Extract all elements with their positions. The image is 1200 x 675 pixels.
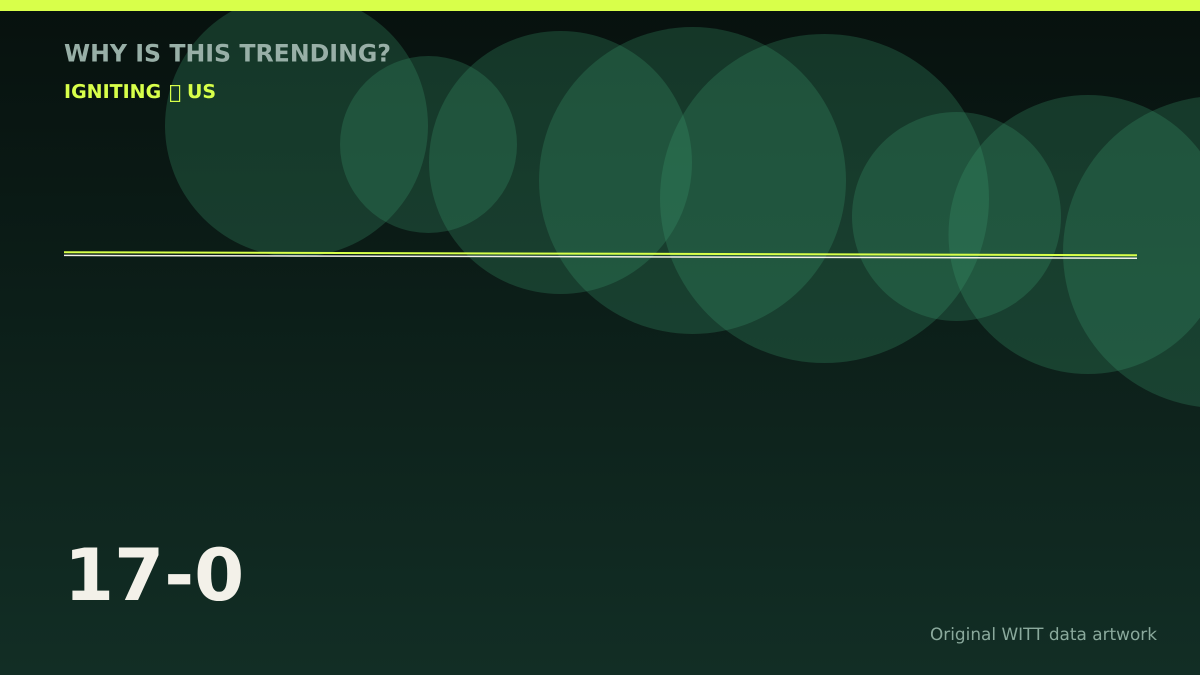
subtitle: IGNITING (64, 81, 161, 103)
top accent bar (0, 0, 1200, 11)
icon: missing-glyph box (171, 86, 180, 101)
credit: Original WITT data artwork (930, 625, 1157, 645)
subtitle (64, 81, 216, 103)
bubble chart (165, 0, 1200, 408)
headline stat: 17-0 (64, 533, 244, 617)
trend lines (64, 252, 1137, 258)
subtitle: US (187, 81, 216, 103)
title: WHY IS THIS TRENDING? (64, 40, 391, 68)
